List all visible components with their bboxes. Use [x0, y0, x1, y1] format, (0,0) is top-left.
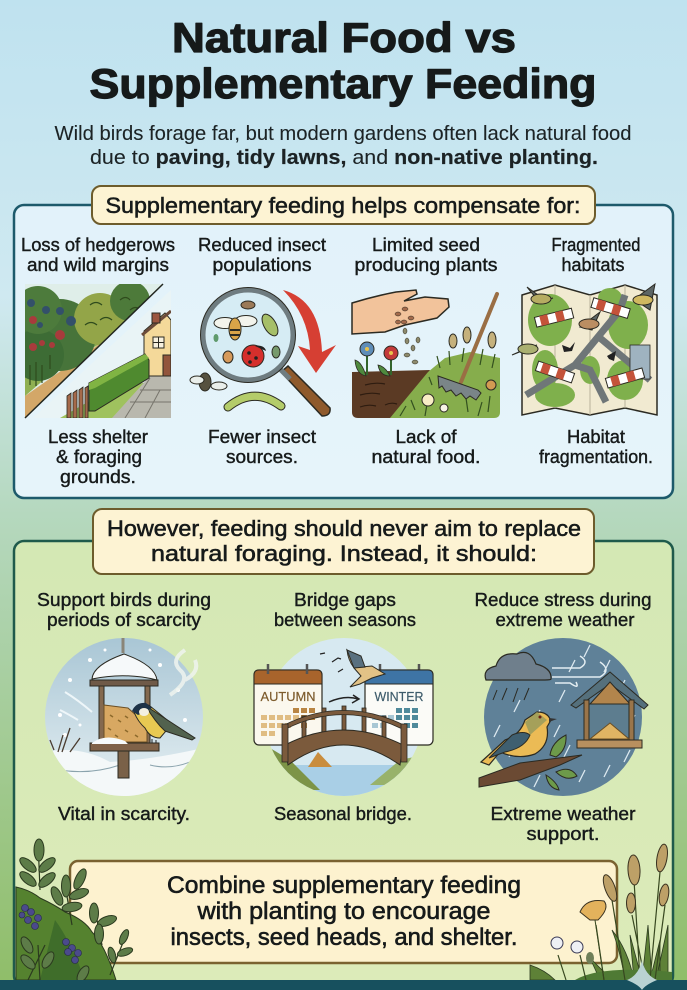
callout: combine feeding with planting: insects, seed heads, and shelter.	[170, 924, 518, 951]
callout: combine feeding with planting: with planting to encourage	[196, 898, 490, 925]
label: less shelter: grounds.	[60, 467, 136, 487]
column: extreme weather: Reduce stress during	[474, 590, 652, 610]
intro text: due to paving, tidy lawns, and non-native planting.	[90, 147, 598, 169]
panel: how feeding should help	[14, 509, 673, 986]
label: less shelter: Less shelter	[48, 427, 148, 447]
column: scarcity: Support birds during	[37, 590, 211, 610]
column: seasons	[254, 590, 433, 800]
decorative sparkle	[627, 960, 657, 990]
column: seasons: between seasons	[274, 610, 416, 630]
label: fragmentation	[539, 427, 653, 467]
callout: combine feeding with planting	[70, 861, 617, 963]
heading: never replace foraging	[93, 509, 594, 574]
panel: compensate	[12, 186, 673, 498]
heading: compensate	[92, 186, 595, 224]
icon: autumn calendar	[254, 664, 419, 745]
plants: left shrub	[16, 839, 134, 984]
icon: winter calendar: WINTER	[374, 689, 424, 704]
label: lack of food	[372, 427, 480, 467]
label: vital in scarcity: Vital in scarcity.	[58, 804, 190, 824]
icon: snowy bird feeder	[45, 638, 203, 800]
icon: hedgerow and garden	[12, 281, 171, 418]
label: fewer insects: sources.	[226, 447, 298, 467]
label: seasonal bridge: Seasonal bridge.	[274, 804, 412, 824]
heading: never replace foraging: However, feeding should never aim to replace	[107, 516, 581, 541]
intro text	[54, 123, 632, 169]
column: extreme weather	[474, 590, 652, 796]
column: fragmented habitats: Fragmented	[552, 235, 640, 255]
footer bar	[0, 980, 687, 990]
icon: bird in storm	[479, 638, 648, 796]
label: extreme weather support: support.	[526, 824, 600, 844]
heading: never replace foraging: natural foraging. Instead, it should:	[151, 541, 537, 566]
label: fragmentation: fragmentation.	[539, 447, 653, 467]
label: extreme weather support: Extreme weather	[490, 804, 636, 824]
icon: seasonal bridge	[254, 638, 433, 800]
column: seed plants: producing plants	[354, 255, 498, 275]
intro text: Wild birds forage far, but modern gardens often lack natural food	[54, 123, 632, 145]
icon: hand, seeds and rake	[352, 290, 500, 418]
heading: compensate: Supplementary feeding helps compensate for:	[106, 193, 580, 218]
column: scarcity: periods of scarcity	[47, 610, 201, 630]
label: fewer insects: Fewer insect	[208, 427, 316, 447]
label: fragmentation: Habitat	[567, 427, 625, 447]
label: fewer insects	[208, 427, 316, 467]
column: seasons: Bridge gaps	[294, 590, 396, 610]
plants: right grasses and flowers	[530, 843, 672, 980]
column: insects	[190, 235, 336, 416]
title: Supplementary Feeding	[90, 60, 596, 107]
column: extreme weather: extreme weather	[496, 610, 635, 630]
icon: magnifying glass with insects	[190, 288, 336, 416]
column: seed plants: Limited seed	[372, 235, 480, 255]
icon: fragmented habitat map	[512, 284, 657, 415]
column: hedgerows: Loss of hedgerows	[21, 235, 175, 255]
label: lack of food: Lack of	[396, 427, 458, 447]
title: Natural Food vs	[172, 14, 516, 61]
column: seed plants	[352, 235, 500, 418]
icon: autumn calendar: AUTUMN	[260, 689, 316, 704]
column: insects: populations	[212, 255, 312, 275]
label: less shelter: & foraging	[56, 447, 142, 467]
column: scarcity	[37, 590, 211, 800]
icon: winter calendar	[365, 670, 433, 745]
label: extreme weather support	[490, 804, 636, 844]
column: fragmented habitats: habitats	[562, 255, 624, 275]
column: hedgerows: and wild margins	[27, 255, 169, 275]
label: lack of food: natural food.	[372, 447, 480, 467]
callout: combine feeding with planting: Combine supplementary feeding	[167, 872, 521, 899]
label: less shelter	[48, 427, 148, 487]
column: insects: Reduced insect	[198, 235, 326, 255]
column: hedgerows	[12, 235, 175, 418]
column: fragmented habitats	[512, 235, 657, 415]
title	[90, 14, 596, 107]
